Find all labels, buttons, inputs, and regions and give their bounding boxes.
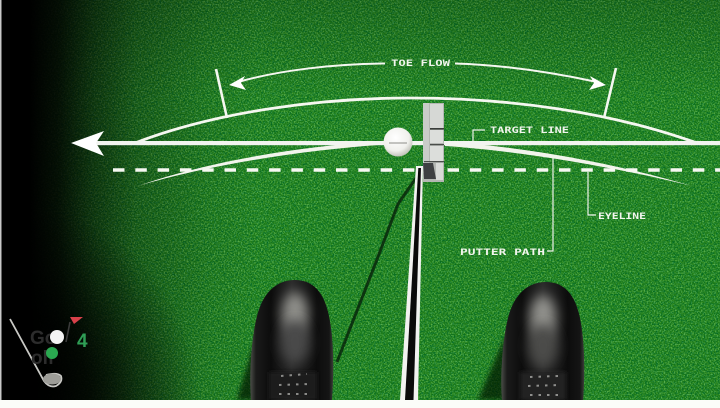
white bottom strip xyxy=(0,400,720,408)
putter path arc, right xyxy=(445,142,692,186)
eyeline dashed xyxy=(113,168,720,172)
logo flag xyxy=(66,317,83,342)
putter shaft xyxy=(400,166,423,400)
toe flow arc xyxy=(135,98,697,143)
laces xyxy=(269,372,317,400)
logo number 4: 4 xyxy=(77,331,88,352)
logo: Golf 4: olf xyxy=(31,348,55,369)
target line with arrow xyxy=(71,131,720,156)
logo word: Go xyxy=(30,328,56,349)
eyeline label xyxy=(588,172,646,222)
toe flow label with arrows and end ticks: TOE FLOW xyxy=(391,59,451,69)
logo white ball xyxy=(50,330,64,344)
putter head xyxy=(423,103,444,182)
left shoe xyxy=(237,280,333,400)
putter path arc, left xyxy=(138,141,385,186)
logo club head xyxy=(43,374,61,384)
logo club xyxy=(10,319,61,386)
target line label: TARGET LINE xyxy=(490,126,569,136)
eyeline label: EYELINE xyxy=(598,212,646,222)
putter path label: PUTTER PATH xyxy=(460,248,545,258)
right shoe xyxy=(478,282,584,402)
logo green ball xyxy=(46,347,58,359)
target line label xyxy=(473,126,569,142)
logo: Golf 4 xyxy=(10,317,88,386)
toe flow label with arrows and end ticks xyxy=(216,59,616,118)
laces xyxy=(520,372,566,400)
putter shaft shadow xyxy=(337,178,416,362)
golf ball xyxy=(384,128,412,156)
putter path label xyxy=(460,155,553,258)
